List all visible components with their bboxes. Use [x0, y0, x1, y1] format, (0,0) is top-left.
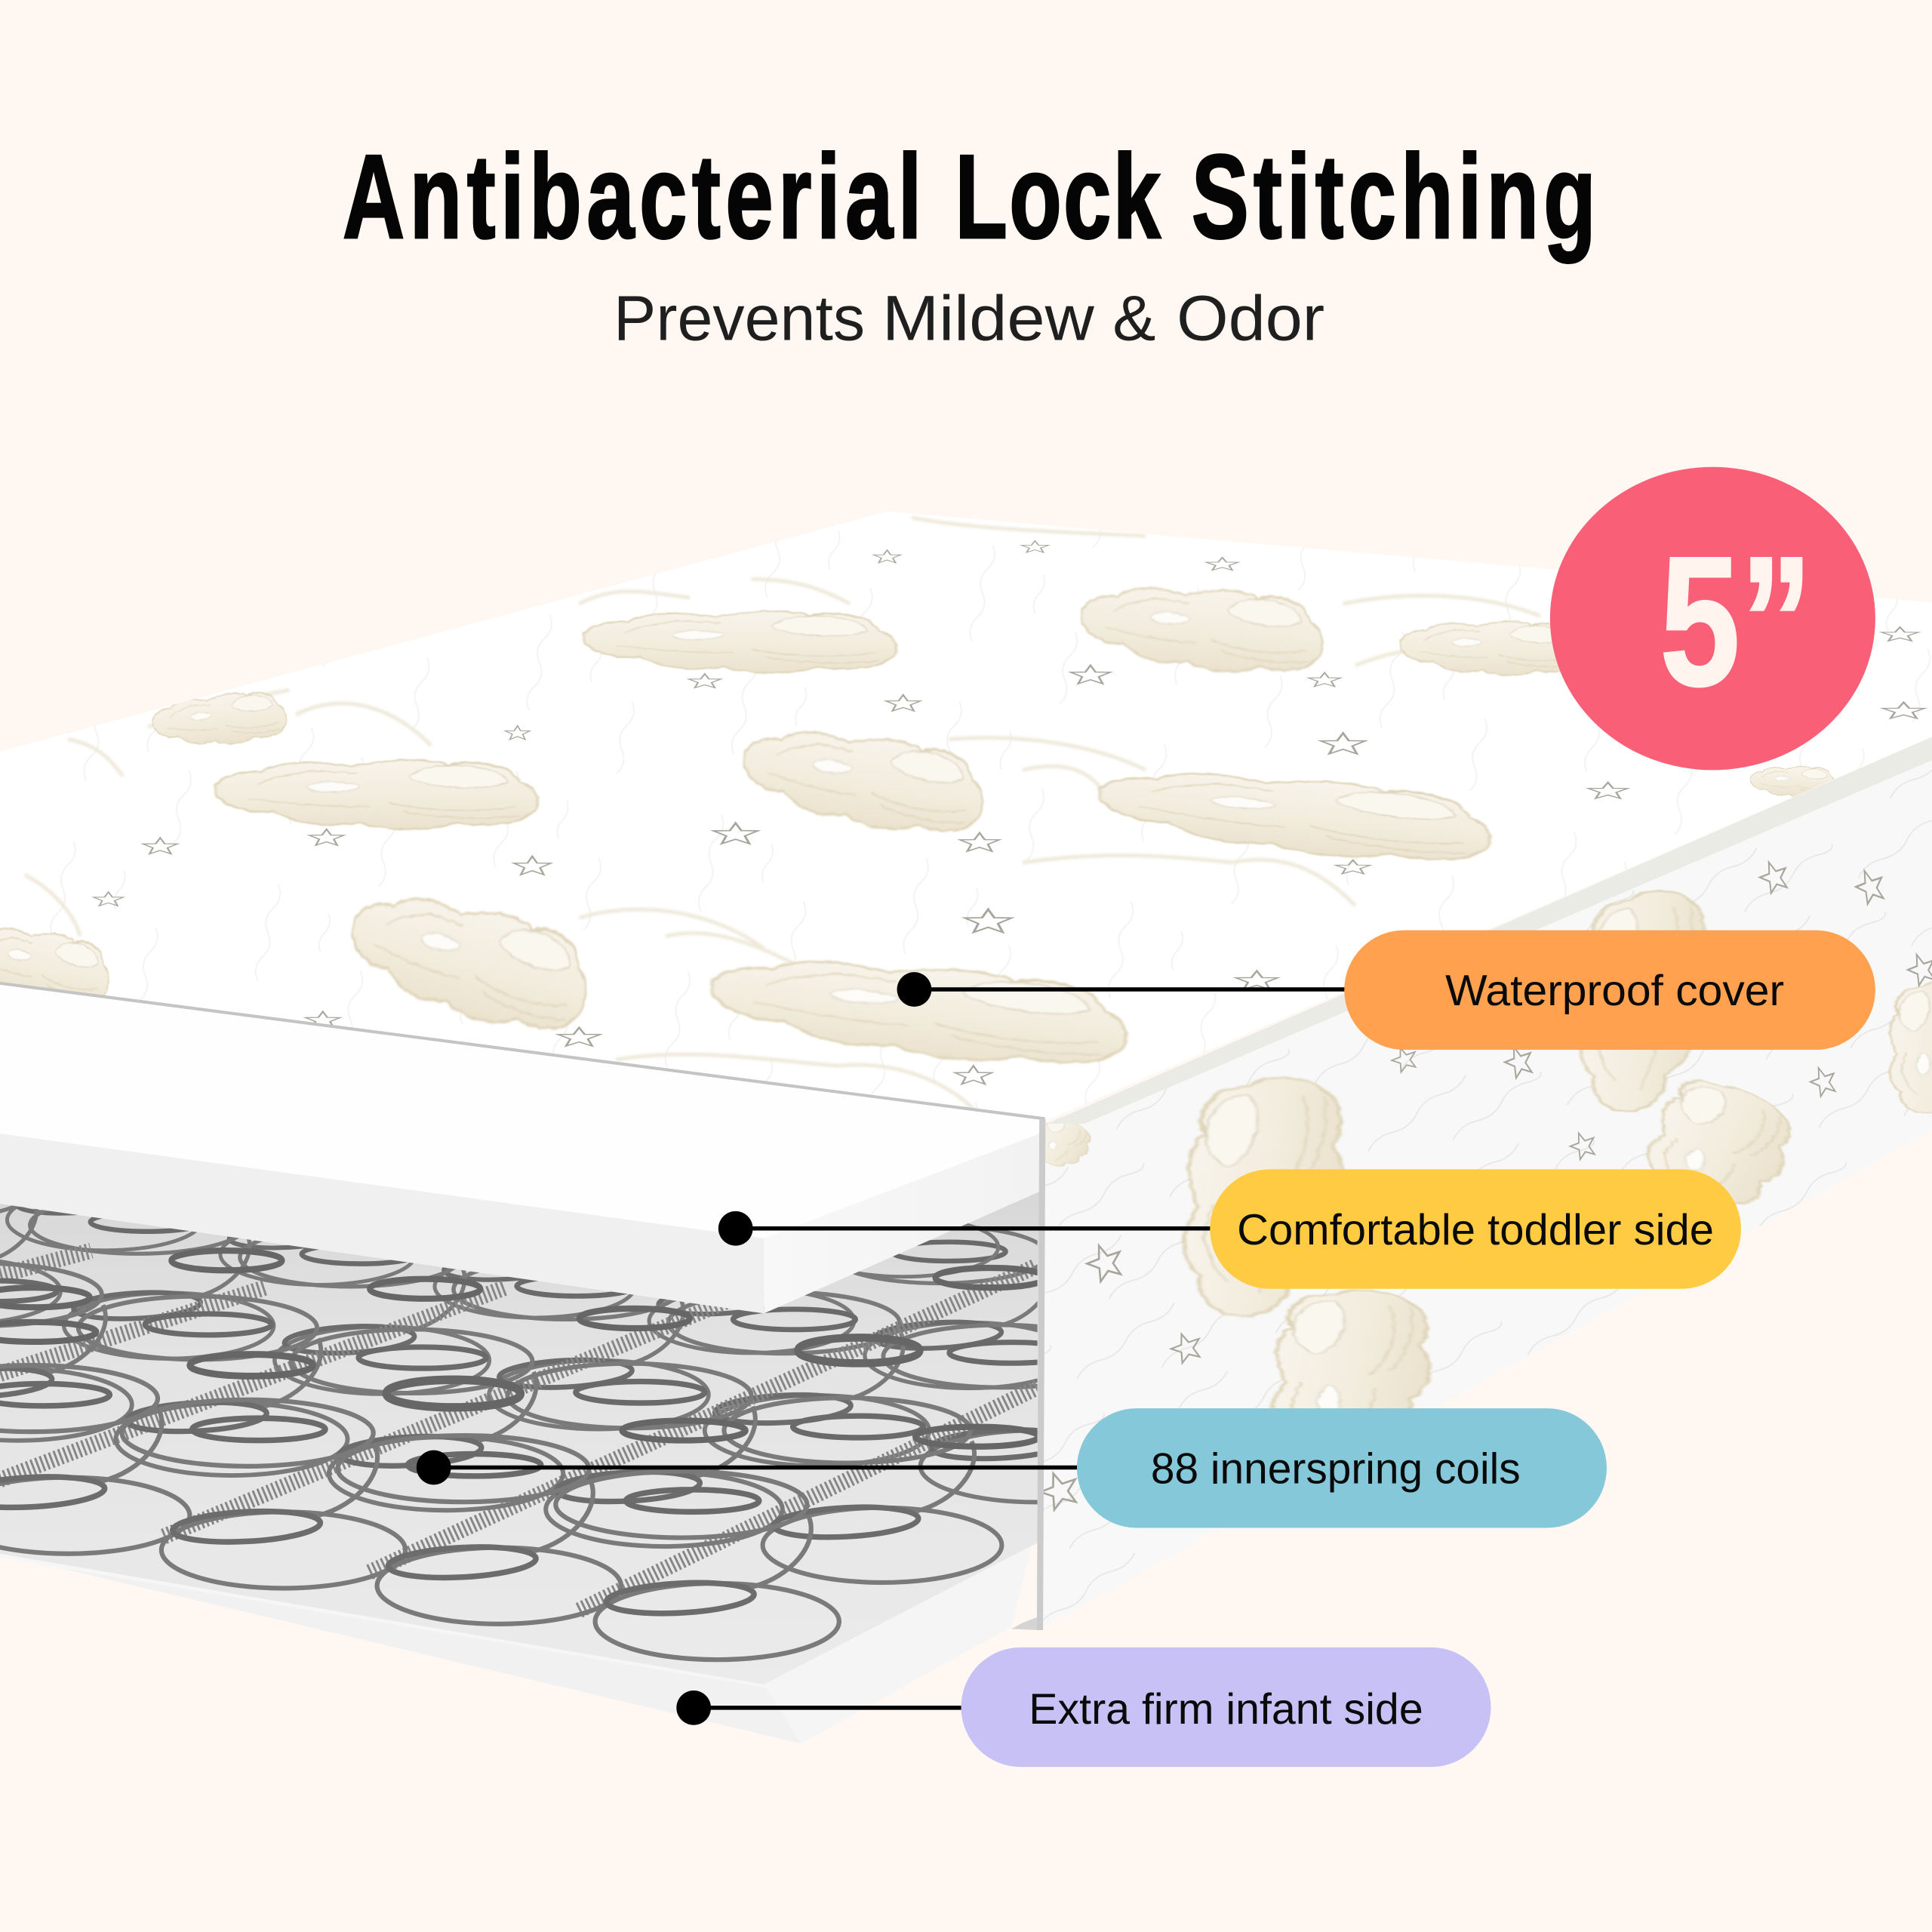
subtitle: Mildew: [882, 282, 1095, 354]
faint cloud outlines: [25, 518, 1546, 1109]
title: Stitching: [1192, 131, 1596, 264]
cover front edge: [0, 983, 1044, 1118]
callout: waterproof cover: [897, 931, 1875, 1050]
subtitle: Prevents: [614, 282, 865, 354]
callout: extra firm infant side: Extra firm infant side: [1029, 1685, 1423, 1734]
callout: 88 innerspring coils: 88 innerspring coils: [1151, 1445, 1521, 1494]
callout: comfortable toddler side: Comfortable toddler side: [1237, 1206, 1714, 1254]
mattress illustration: [0, 512, 1932, 1743]
subtitle: Odor: [1177, 282, 1324, 354]
spring well: [0, 1171, 1040, 1684]
callout: extra firm infant side: [676, 1647, 1491, 1767]
foam comfort layer: [0, 983, 1044, 1313]
subtitle: [614, 282, 1324, 354]
corner seam: [1040, 1118, 1042, 1630]
title: [343, 131, 1596, 264]
badge: 5 inch: [1550, 467, 1875, 770]
mattress side panel: [1011, 737, 1932, 1630]
title: Antibacterial: [343, 131, 921, 264]
badge: 5 inch: 5”: [1660, 518, 1813, 724]
waterproof cover top surface: [0, 512, 1932, 1630]
callout: comfortable toddler side: [718, 1169, 1741, 1289]
title: Lock: [955, 131, 1161, 264]
innerspring coils: [0, 1205, 1038, 1662]
callout: waterproof cover: Waterproof cover: [1445, 967, 1784, 1015]
subtitle: &: [1112, 282, 1155, 354]
bottom firm layer: [0, 1541, 1032, 1743]
callout: 88 innerspring coils: [417, 1408, 1607, 1527]
